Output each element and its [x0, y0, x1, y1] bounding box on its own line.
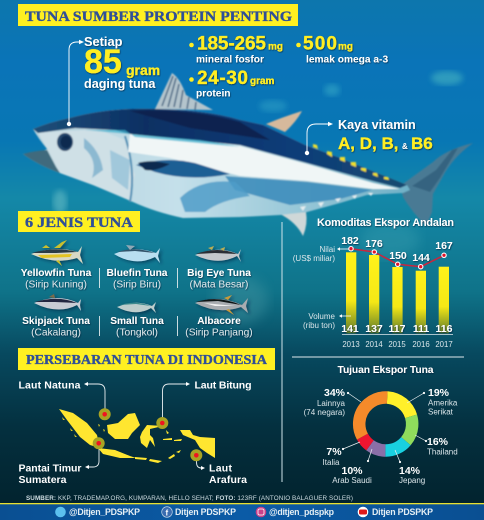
footer handles [69, 507, 433, 517]
heading: tujuan: Tujuan Ekspor Tuna [338, 365, 434, 376]
callout: Laut Arafura: Arafura [209, 474, 247, 486]
label: amerika: 19% [428, 387, 450, 399]
legend: nilai: Nilai [319, 245, 335, 254]
legend: volume [303, 312, 351, 330]
tuna fish illustration [23, 73, 473, 236]
stat: fosfor: mineral fosfor [196, 54, 264, 66]
icon: facebook: f [166, 508, 168, 518]
callout: Laut Natuna: Laut Natuna [18, 380, 81, 392]
second dorsal fin [266, 111, 302, 132]
callout: Pantai Timur Sumatera [18, 437, 105, 486]
callout: 85 gram: Setiap [84, 34, 123, 49]
callout: Laut Bitung: Laut Bitung [194, 380, 252, 392]
icon: big eye [195, 246, 241, 262]
value labels: 116 [436, 323, 453, 335]
years: 2013 [342, 340, 360, 349]
legend: volume: Volume [308, 312, 336, 321]
label: thailand [427, 436, 458, 456]
title banner: TUNA SUMBER PROTEIN PENTING [25, 9, 292, 25]
stat: omega: lemak omega a-3 [306, 54, 388, 66]
callout: Laut Arafura [190, 449, 247, 486]
label: thailand: 16% [427, 436, 449, 448]
tail fin [400, 143, 473, 226]
callout: vitamin [305, 118, 433, 155]
labels: species names: (Sirip Biru) [113, 280, 161, 290]
label: thailand: Thailand [427, 448, 458, 456]
stat: protein: 24-30 [197, 68, 248, 89]
value labels: 150 [389, 250, 407, 262]
label: italia: 7% [326, 446, 342, 458]
source line: SUMBER: KKP, TRADEMAP.ORG, KUMPARAN, HELLO SEHAT; FOTO: 123RF (ANTONIO BALAGUER SOLER) [26, 495, 353, 502]
gill line [125, 136, 132, 202]
labels: species names: Bluefin Tuna [107, 268, 168, 279]
value labels: 176 [365, 238, 383, 250]
stat: protein [189, 68, 275, 100]
dark back [33, 109, 407, 188]
years: 2015 [388, 340, 406, 349]
stat: fosfor [189, 34, 283, 66]
callout: Laut Bitung [156, 380, 252, 429]
callout: vitamin: Kaya vitamin [338, 118, 416, 132]
dorsal fin [155, 73, 213, 110]
stat: protein: gram [250, 76, 275, 87]
bars [346, 252, 449, 333]
pectoral fin [136, 160, 230, 178]
stat: omega: mg [338, 42, 353, 52]
head mottling [84, 138, 103, 178]
map: Indonesia [59, 409, 215, 463]
legend: volume: (ribu ton) [303, 321, 335, 330]
labels: species names: Albacore [197, 316, 241, 327]
labels: species names: (Sirip Kuning) [25, 280, 87, 290]
icon: skipjack [34, 294, 81, 311]
icon: albacore [195, 295, 248, 315]
labels: species names: (Tongkol) [116, 328, 158, 338]
icon: youtube [358, 507, 368, 517]
years: 2014 [365, 340, 383, 349]
label: lainnya: Lainnya [317, 399, 346, 408]
footer handles: @ditjen_pdspkp [269, 507, 335, 517]
value labels: 117 [389, 323, 406, 335]
labels: species names [21, 268, 253, 338]
heading: persebaran [18, 348, 275, 370]
callout: Pantai Timur Sumatera: Sumatera [18, 474, 67, 486]
heading: komoditas: Komoditas Ekspor Andalan [317, 217, 454, 229]
footer bar [0, 503, 484, 520]
value labels [341, 235, 453, 335]
label: jepang: 14% [399, 465, 421, 477]
label: arab saudi: 10% [341, 465, 363, 477]
value labels: 167 [435, 240, 453, 252]
head [38, 130, 135, 200]
chart: tujuan ekspor [304, 365, 458, 485]
legend: nilai: (US$ miliar) [293, 254, 335, 263]
value labels: 141 [341, 323, 359, 335]
finlets [313, 144, 389, 180]
icon: twitter [55, 507, 66, 517]
callout: vitamin: A, D, B, [338, 134, 398, 153]
heading: persebaran: PERSEBARAN TUNA DI INDONESIA [26, 353, 268, 368]
years [342, 340, 453, 349]
label: lainnya [304, 387, 346, 417]
value labels: 182 [341, 235, 359, 247]
label: jepang [399, 465, 425, 485]
title banner [18, 4, 298, 26]
callout: vitamin: B6 [411, 134, 433, 153]
label: jepang: Jepang [399, 476, 425, 485]
lower fin [280, 212, 307, 236]
callout: 85 gram: gram [126, 62, 160, 78]
chart: komoditas ekspor [293, 217, 454, 349]
eye [57, 133, 73, 151]
callout: Pantai Timur Sumatera: Pantai Timur [18, 462, 82, 474]
stat: omega [296, 34, 388, 66]
panel: tuna species [21, 240, 253, 338]
labels: species names: Yellowfin Tuna [21, 268, 92, 279]
donut [357, 395, 414, 453]
icon: yellowfin [31, 240, 83, 266]
label: lainnya: 34% [324, 387, 346, 399]
silver lateral band [128, 134, 400, 189]
label: amerika [428, 387, 458, 416]
labels: species names: Big Eye Tuna [187, 268, 251, 279]
label: italia: Italia [323, 458, 340, 467]
value labels: 144 [412, 252, 430, 264]
label: amerika: Amerika [428, 398, 458, 408]
callout: vitamin: & [402, 142, 408, 151]
labels: species names: (Sirip Panjang) [185, 328, 253, 338]
value labels: 111 [413, 323, 429, 335]
callout: Laut Natuna [18, 380, 111, 420]
heading: 6 jenis tuna [18, 211, 140, 232]
footer handles: Ditjen PDSPKP [372, 507, 433, 517]
callout: 85 gram: 85 [84, 43, 122, 81]
stat: fosfor: mg [268, 42, 283, 52]
labels: species names: (Cakalang) [31, 328, 81, 338]
stat: fosfor: 185-265 [197, 34, 266, 54]
belly finlets [300, 193, 373, 211]
callout: Laut Arafura: Laut [209, 462, 232, 474]
label: arab saudi: Arab Saudi [332, 476, 372, 485]
label: arab saudi [332, 465, 372, 485]
heading: 6 jenis tuna: 6 JENIS TUNA [25, 215, 133, 231]
icon: facebook [162, 507, 172, 518]
body [23, 109, 410, 218]
donut leader lines [343, 393, 426, 462]
years: 2016 [412, 340, 430, 349]
legend: nilai [293, 245, 349, 263]
label: italia [323, 446, 342, 467]
lower jaw [23, 150, 60, 173]
labels: species names: Skipjack Tuna [22, 316, 90, 327]
stat: protein: protein [196, 88, 231, 100]
label: lainnya: (74 negara) [304, 408, 345, 417]
years: 2017 [435, 340, 453, 349]
stat: omega: 500 [303, 34, 337, 54]
callout: 85 gram: daging tuna [84, 77, 156, 91]
footer handles: @Ditjen_PDSPKP [69, 507, 140, 517]
icon: small tuna [117, 302, 156, 313]
labels: species names: (Mata Besar) [190, 280, 248, 290]
value labels: 137 [365, 323, 383, 335]
line series [351, 249, 444, 267]
blue flank [225, 176, 372, 205]
labels: species names: Small Tuna [110, 316, 164, 327]
icon: bluefin [114, 245, 160, 263]
label: amerika: Serikat [428, 408, 454, 416]
callout: 85 gram [67, 34, 160, 126]
footer handles: Ditjen PDSPKP [175, 507, 236, 517]
icon: instagram [256, 507, 266, 517]
